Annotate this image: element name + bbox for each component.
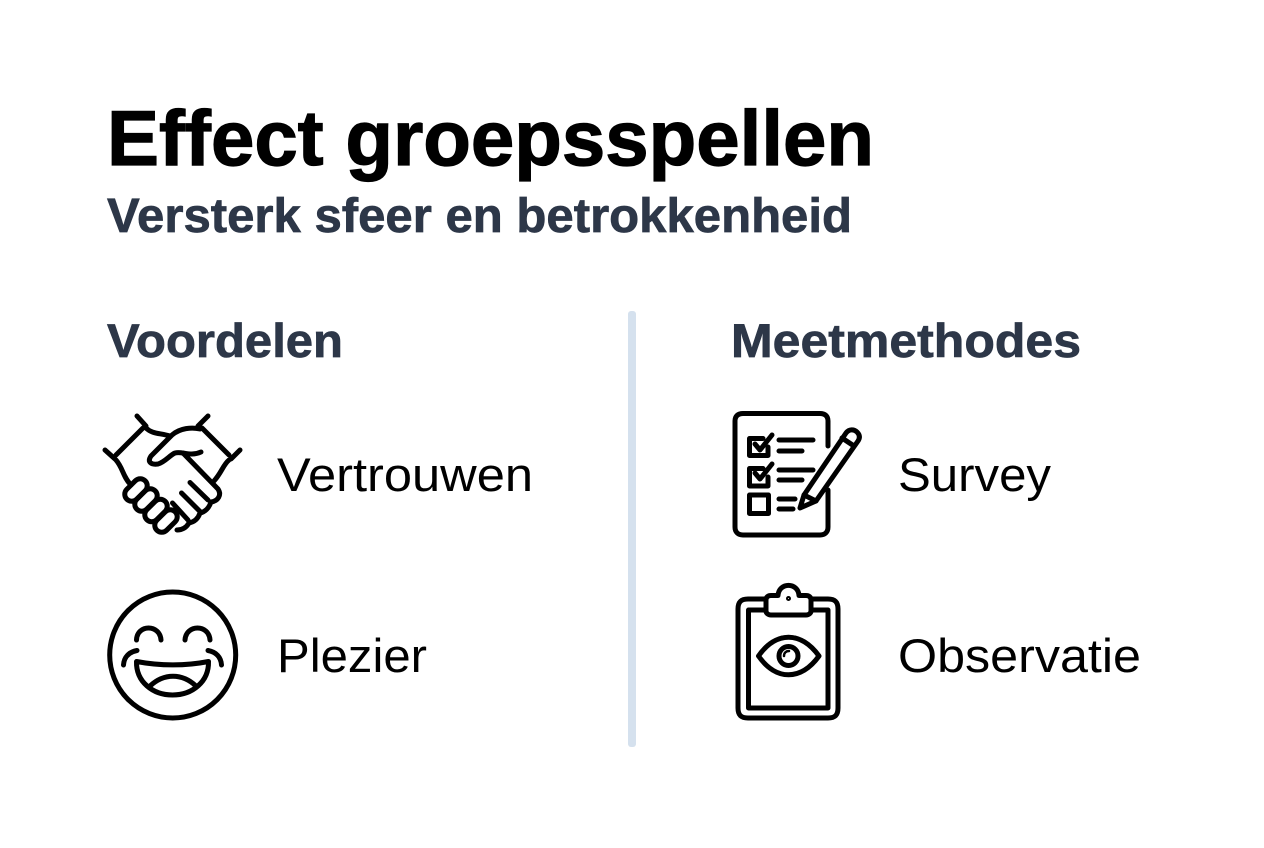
icon: handshake — [105, 416, 240, 535]
divider — [628, 311, 636, 747]
title: Effect groepsspellen — [107, 94, 874, 182]
label: vertrouwen: Vertrouwen — [277, 448, 533, 501]
panel: meetmethodes — [731, 314, 1141, 718]
subtitle: Versterk sfeer en betrokkenheid — [107, 190, 852, 243]
heading: meetmethodes: Meetmethodes — [731, 314, 1081, 367]
label: plezier: Plezier — [277, 629, 427, 682]
label: observatie: Observatie — [898, 629, 1141, 682]
label: survey: Survey — [898, 448, 1052, 501]
icon: laughing face — [110, 592, 236, 718]
icon: survey checklist with pencil — [735, 414, 859, 535]
icon: clipboard with eye — [738, 585, 838, 718]
panel: voordelen — [105, 314, 533, 718]
heading: voordelen: Voordelen — [107, 314, 343, 367]
